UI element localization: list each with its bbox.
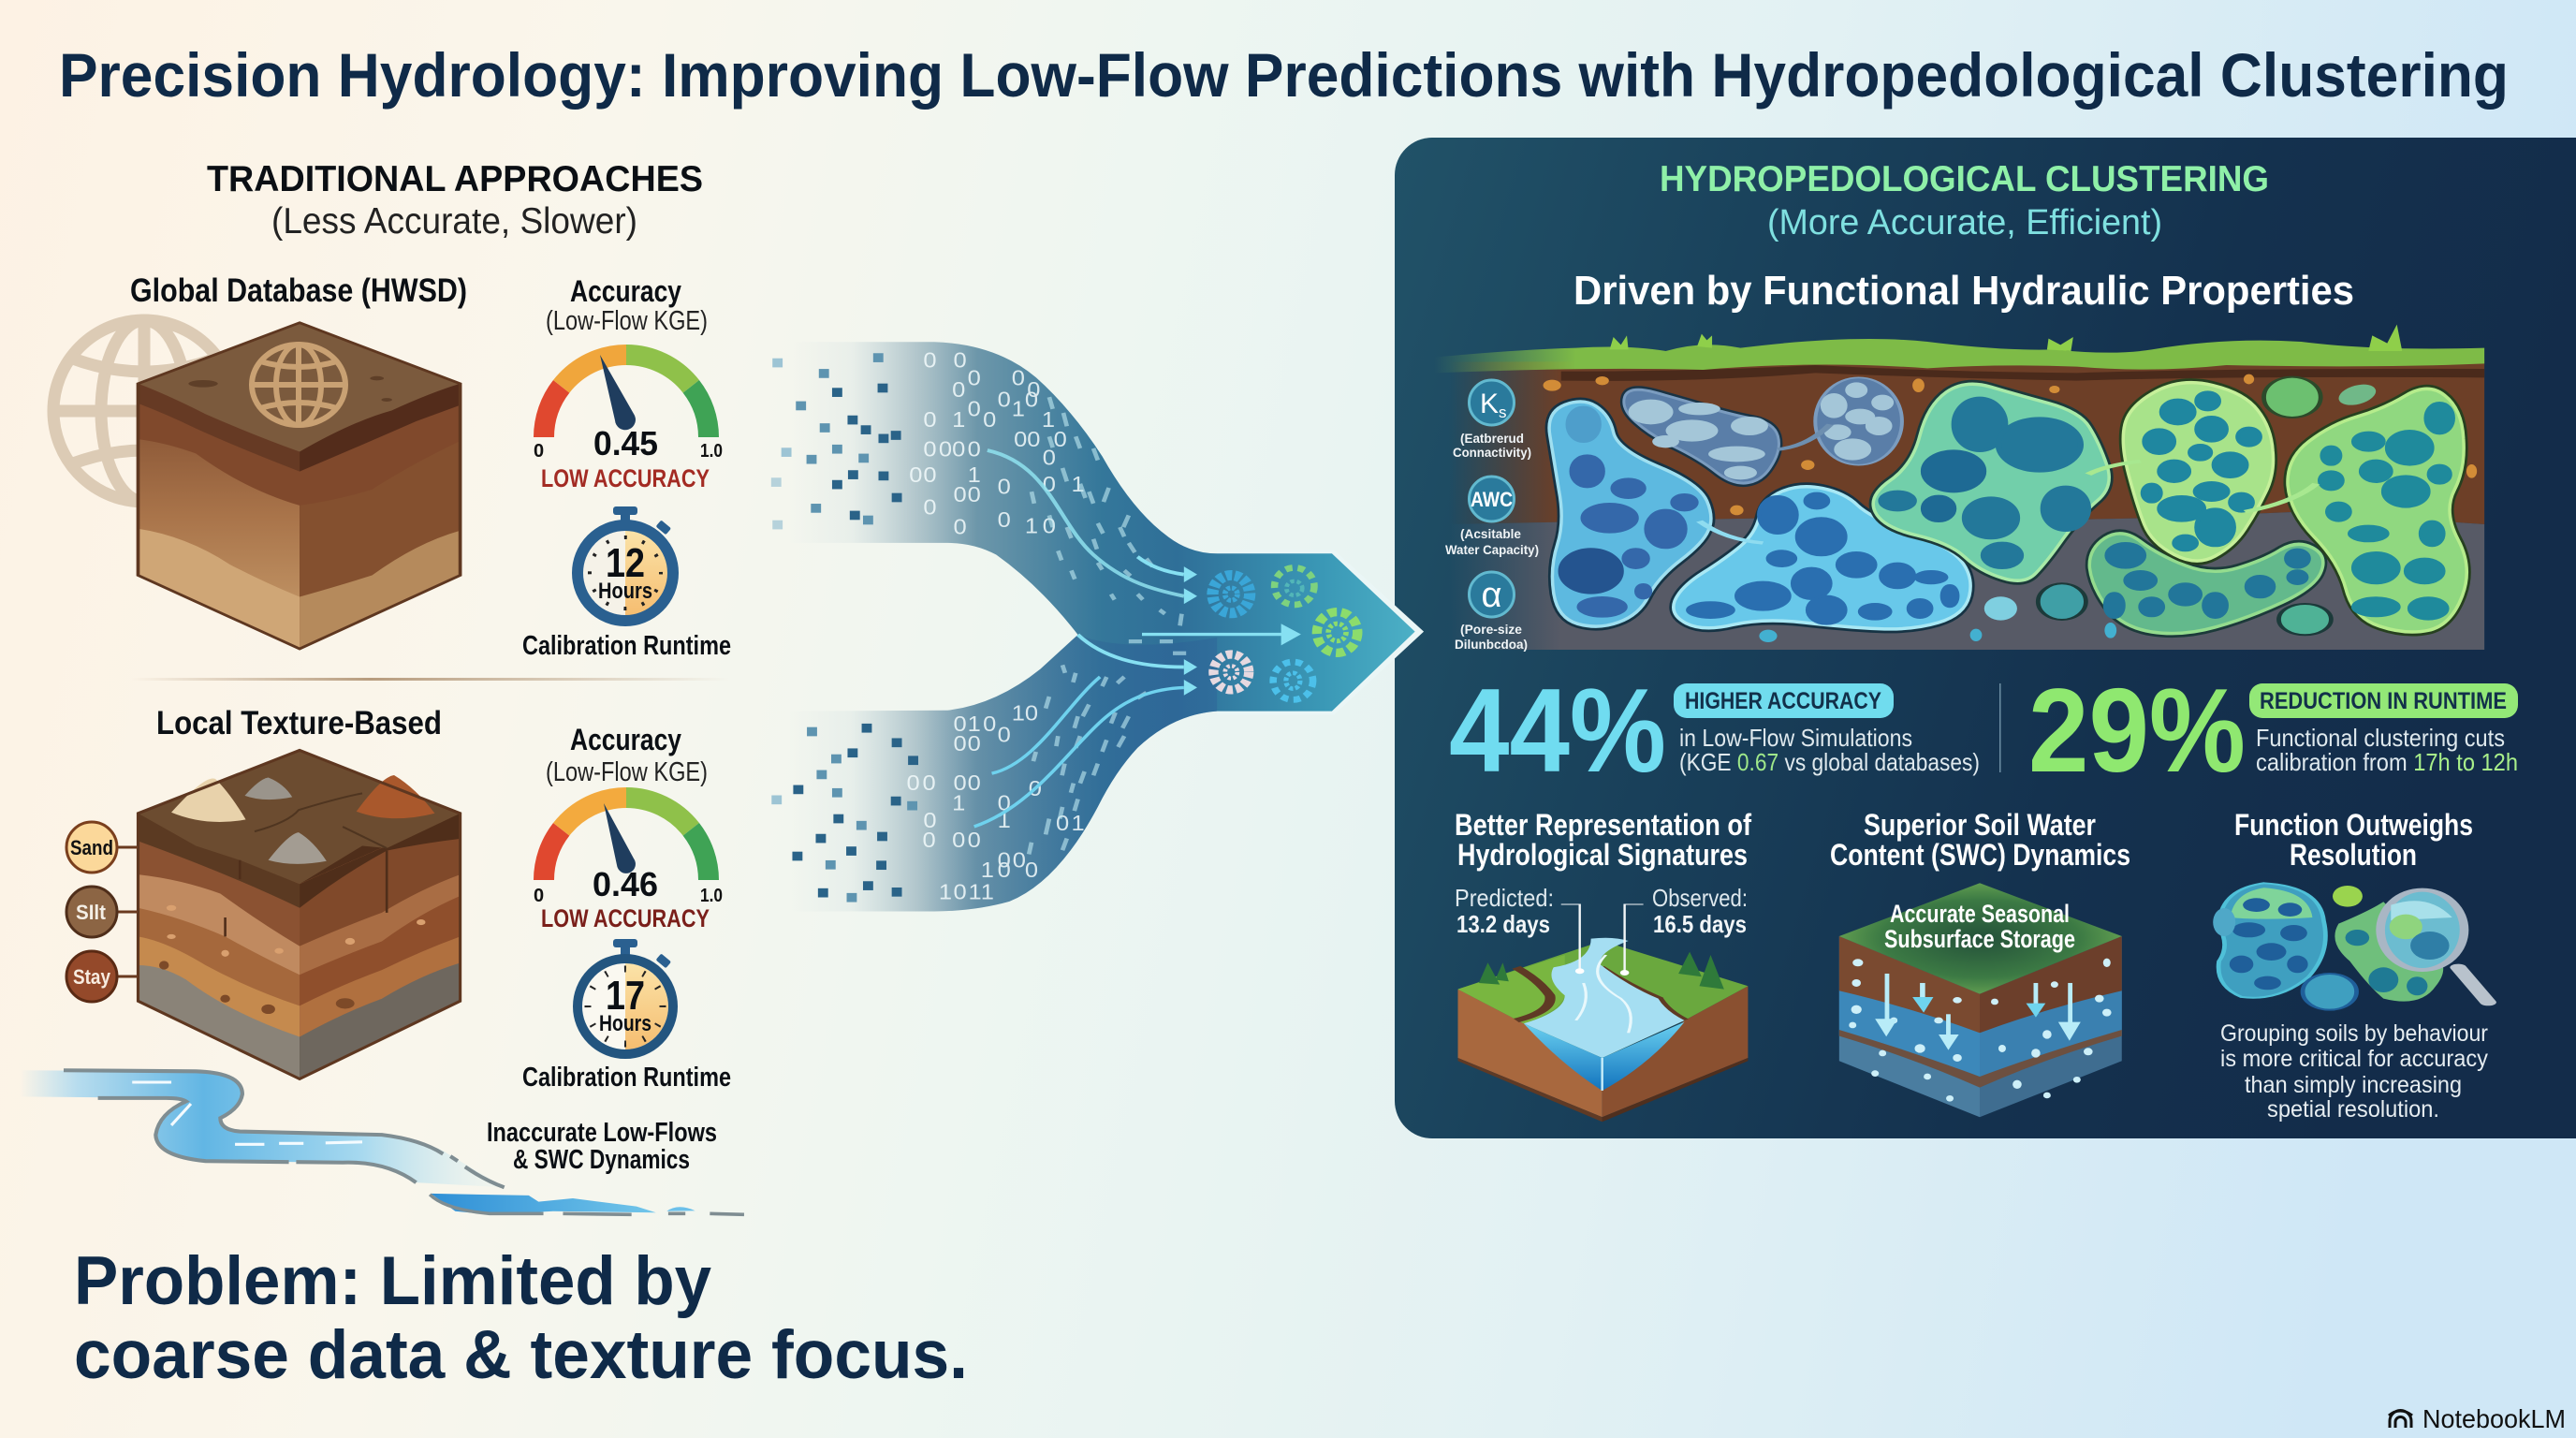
body text: is more critical for accuracy (2220, 1046, 2488, 1072)
storage label: Subsurface Storage (1884, 925, 2075, 953)
binary digits: 0101 (923, 408, 1055, 433)
binary digits: 00 (953, 483, 981, 507)
heading: hydropedological clustering (1660, 159, 2269, 242)
body text (2220, 1020, 2488, 1123)
data squares (772, 354, 917, 902)
problem statement: coarse data & texture focus. (74, 1317, 968, 1393)
stopwatch 2: 17 hours (578, 939, 673, 1054)
body text: spetial resolution. (2267, 1096, 2439, 1123)
soil cross-section with clusters (1434, 325, 2484, 650)
binary digits: 00 (968, 367, 1025, 390)
predicted and observed values (1455, 884, 1748, 938)
column 3: function outweighs resolution (2213, 808, 2488, 1123)
side label: AWC: (Acsitable (1460, 526, 1521, 541)
accuracy label 2: Accuracy (570, 723, 681, 756)
accuracy label 2 (546, 723, 708, 787)
heading: Hydrological Signatures (1457, 838, 1748, 872)
heading: Content (SWC) Dynamics (1830, 838, 2130, 872)
side label: Ks: (Eatbrerud (1460, 431, 1524, 446)
heading: traditional approaches (207, 159, 703, 242)
binary digits: 01 (968, 398, 1025, 421)
soil cube: local texture (138, 750, 461, 1078)
soil texture labels: sand, silt, stay: SIlt (76, 901, 107, 924)
binary digits: 01 (1012, 702, 1038, 726)
stopwatch 2: 17 hours: Hours (599, 1011, 651, 1036)
side label: alpha: α (1482, 576, 1501, 615)
problem statement: Problem: Limited by (74, 1243, 711, 1319)
predicted and observed values: Predicted: (1455, 884, 1554, 912)
soil cluster icons (1212, 567, 1357, 699)
icon: globe on cube (252, 345, 345, 425)
binary digits: 00 (953, 732, 981, 756)
stat: 44% higher accuracy: (KGE 0.67 vs global databases) (1679, 748, 1980, 776)
panel: traditional approaches (20, 159, 968, 1393)
gauge 2: 0.46 low accuracy: 0 (534, 886, 544, 906)
heading: traditional approaches: TRADITIONAL APPROACHES (207, 159, 703, 199)
stat: 44% higher accuracy: HIGHER ACCURACY (1685, 688, 1881, 714)
callout: inaccurate low-flows: & SWC Dynamics (513, 1145, 690, 1175)
calibration runtime label 1: Calibration Runtime (522, 631, 731, 661)
gauge 2: 0.46 low accuracy: 1.0 (700, 886, 723, 906)
stat: 29% reduction in runtime: 29% (2028, 664, 2246, 797)
callout: inaccurate low-flows (487, 1118, 717, 1175)
stat: 44% higher accuracy: 44% (1449, 664, 1666, 797)
stopwatch 1: 12 hours: Hours (598, 579, 652, 604)
binary digits: 0 (998, 724, 1011, 747)
soil storage block icon (1839, 883, 2122, 1117)
gauge 1: 0.45 low accuracy (534, 355, 723, 492)
binary digits: 0 (953, 516, 967, 539)
heading: Better Representation of (1455, 808, 1751, 842)
binary digits: 01 (1043, 473, 1085, 497)
column 1: hydrological signatures (1455, 808, 1751, 1122)
body text: than simply increasing (2245, 1072, 2462, 1098)
gauge 1: 0.45 low accuracy: 0.45 (593, 424, 658, 462)
side label: alpha: Dilunbcdoa) (1455, 637, 1528, 652)
gauge 2: 0.46 low accuracy: 0.46 (593, 865, 658, 903)
stat: 29% reduction in runtime (2028, 664, 2518, 797)
binary digits: 1011 (939, 881, 994, 904)
binary digits: 0 (1043, 447, 1056, 470)
binary digits: 00 (998, 849, 1026, 873)
column 2: soil water content (1830, 808, 2130, 1117)
binary digits: 010 (953, 712, 996, 737)
binary digits: 00 (923, 349, 967, 373)
storage label (1884, 900, 2075, 953)
binary digits: 01 (923, 809, 1011, 832)
soil cube: global database (138, 323, 461, 649)
heading: Superior Soil Water (1864, 808, 2096, 842)
binary digits: 100 (981, 858, 1038, 882)
gauge 1: 0.45 low accuracy: 1.0 (700, 441, 723, 462)
stopwatch 1: 12 hours: 12 (606, 540, 645, 586)
callout: inaccurate low-flows: Inaccurate Low-Flows (487, 1118, 717, 1148)
panel: hydropedological clustering (1395, 138, 2576, 1138)
gauge 1: 0.45 low accuracy: LOW ACCURACY (541, 464, 710, 492)
subheading: driven by functional hydraulic properties: Driven by Functional Hydraulic Properties (1573, 268, 2354, 314)
calibration runtime label 2: Calibration Runtime (522, 1063, 731, 1093)
gauge 2: 0.46 low accuracy: LOW ACCURACY (541, 904, 710, 932)
cluster: green soil groups (1759, 377, 2466, 642)
stopwatch 2: 17 hours: 17 (606, 973, 645, 1019)
gauge 2: 0.46 low accuracy (534, 798, 723, 932)
stat: 29% reduction in runtime: REDUCTION IN RUNTIME (2260, 688, 2507, 714)
body text: Grouping soils by behaviour (2220, 1020, 2488, 1047)
storage label: Accurate Seasonal (1890, 900, 2070, 928)
side label: AWC: AWC (1471, 488, 1513, 511)
binary digits: 001 (909, 463, 981, 488)
stat: 44% higher accuracy (1449, 664, 1980, 797)
binary digits: 10 (952, 792, 1011, 815)
heading: hydropedological clustering: HYDROPEDOLOGICAL CLUSTERING (1660, 159, 2269, 199)
predicted and observed values: Observed: (1652, 884, 1748, 912)
subheading: global database: Global Database (HWSD) (130, 272, 467, 309)
side label: Ks: Connactivity) (1453, 445, 1531, 460)
side label: Ks: s (1499, 404, 1507, 421)
stat: 29% reduction in runtime: calibration from 17h to 12h (2256, 748, 2518, 776)
heading (1830, 808, 2130, 872)
binary digits: 0 (998, 508, 1011, 533)
stat: 44% higher accuracy: in Low-Flow Simulations (1679, 724, 1912, 752)
accuracy label 1: Accuracy (570, 274, 681, 308)
accuracy label 2: (Low-Flow KGE) (546, 757, 708, 787)
binary digits: 10 (1025, 515, 1056, 538)
side label: Ks: K (1480, 389, 1499, 419)
binary digits: 0 (923, 496, 937, 520)
icon: background globe (53, 320, 235, 502)
heading: Function Outweighs (2234, 808, 2473, 842)
predicted and observed values: 16.5 days (1653, 910, 1747, 938)
subheading: local texture-based: Local Texture-Based (156, 705, 442, 741)
binary digits (906, 349, 1085, 904)
heading (2234, 808, 2473, 872)
binary digits: 000 (922, 829, 981, 852)
heading: Resolution (2290, 838, 2417, 872)
soil texture labels: sand, silt, stay: Stay (73, 965, 111, 989)
heading (1455, 808, 1751, 872)
binary digits: 00 (952, 378, 1040, 403)
binary digits: 000 (1014, 428, 1067, 452)
funnel: data converging into clusters (772, 342, 1424, 911)
binary digits: 0 (998, 476, 1011, 499)
flow arrows (974, 450, 1301, 827)
binary digits: 0 (1029, 777, 1042, 801)
predicted and observed values: 13.2 days (1456, 910, 1550, 938)
problem statement (74, 1243, 968, 1393)
side label: alpha (1455, 572, 1528, 652)
stat: 29% reduction in runtime: Functional clustering cuts (2256, 724, 2505, 752)
magnifier over soil clusters icon (2213, 883, 2488, 1010)
gauge 1: 0.45 low accuracy: 0 (534, 441, 544, 462)
binary digits: 01 (1056, 812, 1085, 836)
icon: broken river (20, 1070, 744, 1214)
stopwatch 1: 12 hours (578, 506, 673, 621)
side label: AWC (1445, 477, 1539, 557)
side label: alpha: (Pore-size (1460, 622, 1522, 637)
accuracy label 1: (Low-Flow KGE) (546, 306, 708, 336)
binary digits: 00 (998, 389, 1038, 412)
soil texture labels: sand, silt, stay: Sand (70, 836, 113, 859)
side label: AWC: Water Capacity) (1445, 542, 1539, 557)
side label: Ks (1453, 380, 1531, 460)
river block icon (1458, 904, 1748, 1122)
notebooklm watermark: NotebookLM (2422, 1404, 2566, 1433)
cluster: blue soil groups (1549, 377, 1970, 629)
binary digits: 0000 (906, 771, 981, 796)
heading: traditional approaches: (Less Accurate, Slower) (271, 201, 637, 242)
binary digits: 0000 (923, 438, 981, 462)
accuracy label 1 (546, 274, 708, 336)
soil texture labels: sand, silt, stay (66, 822, 138, 1002)
heading: hydropedological clustering: (More Accurate, Efficient) (1767, 203, 2162, 242)
